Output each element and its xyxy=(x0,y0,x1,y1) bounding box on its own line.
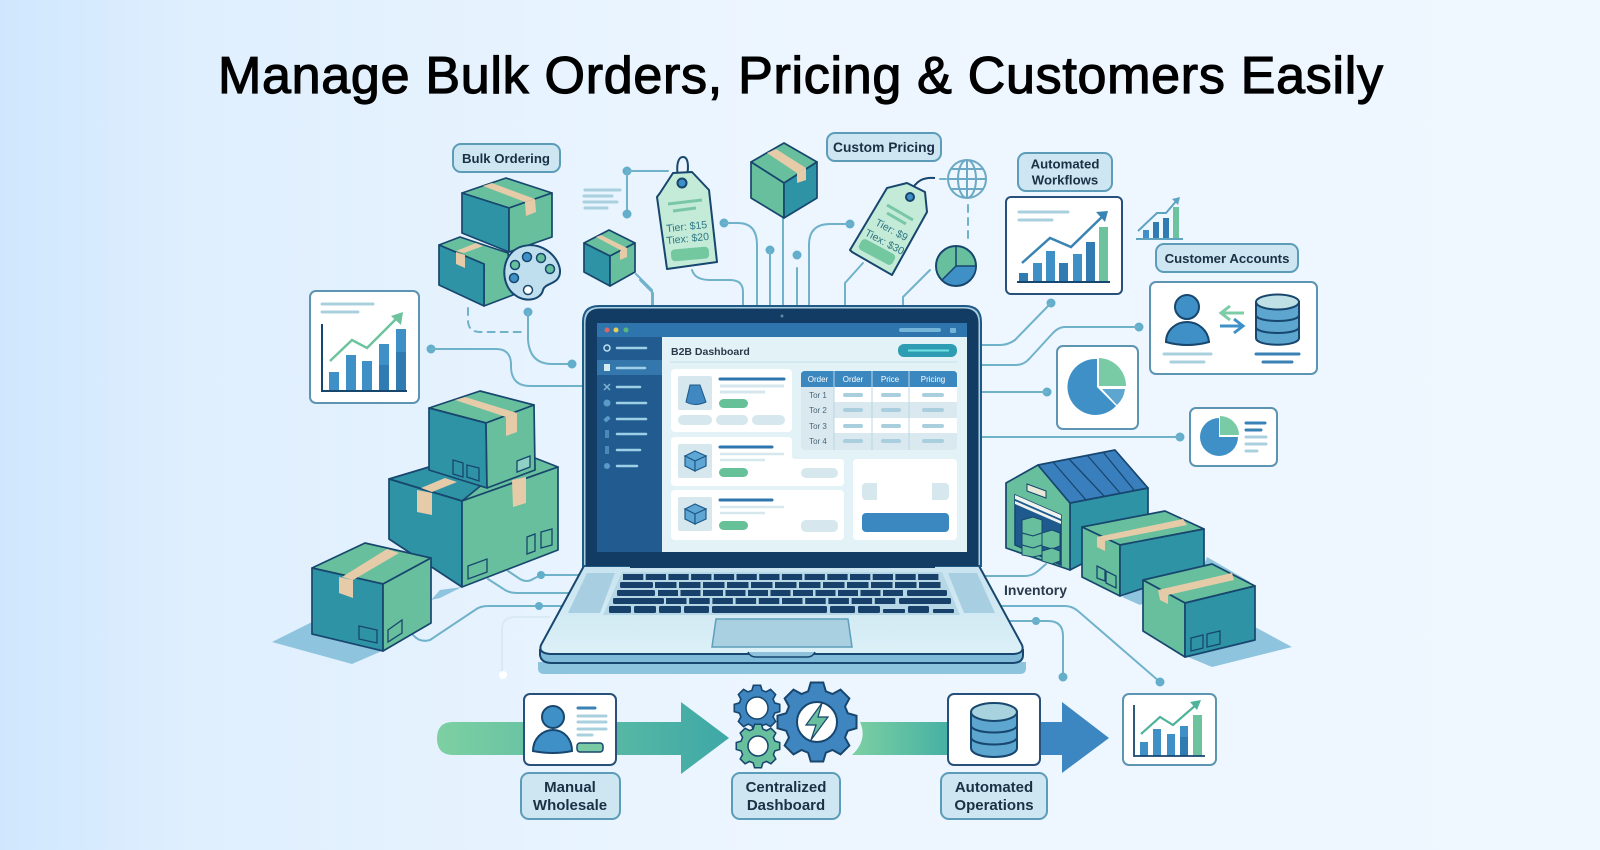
product card 2 xyxy=(671,437,844,486)
label: centralized dashboard: Centralized xyxy=(746,779,826,796)
icon: right price tag: Tier: $9 xyxy=(873,217,910,244)
top box xyxy=(429,391,535,488)
icon: left price tag xyxy=(657,157,717,269)
label: customer accounts xyxy=(1156,244,1298,272)
panel: customer accounts xyxy=(1150,282,1317,374)
icon: small trend chart xyxy=(1136,197,1183,239)
icon: stacked boxes with palette xyxy=(439,178,560,306)
pricing table: Tor 1 xyxy=(809,391,827,400)
arrow: manual to centralized xyxy=(437,702,729,774)
icon: right price tag: Tiex: $30 xyxy=(863,227,906,258)
pricing table: Price xyxy=(881,375,900,384)
panel: small pie chart card xyxy=(1190,408,1277,466)
pricing table: Tor 4 xyxy=(809,437,827,446)
label: customer accounts: Customer Accounts xyxy=(1165,251,1289,266)
icon: sync arrows xyxy=(1220,306,1244,333)
label: centralized dashboard xyxy=(732,773,840,819)
dashboard screen xyxy=(597,323,967,552)
text lines decoration near small box xyxy=(584,190,620,208)
dashboard heading: B2B Dashboard xyxy=(671,346,750,358)
label: bulk ordering xyxy=(453,144,560,172)
window top bar xyxy=(597,323,967,337)
icon: large box stack xyxy=(272,391,558,664)
pricing table: Tor 2 xyxy=(809,406,827,415)
icon: product box xyxy=(685,451,706,471)
icon: customer person xyxy=(1166,295,1209,345)
laptop shadow xyxy=(538,662,1026,674)
icon: warehouse xyxy=(1006,450,1148,570)
label: custom pricing xyxy=(827,133,941,161)
product card 3 xyxy=(671,490,844,540)
label: automated workflows: Automated xyxy=(1031,156,1099,172)
product card 1 xyxy=(671,369,792,432)
front box xyxy=(312,543,431,651)
label: bulk ordering: Bulk Ordering xyxy=(462,151,550,166)
icon: left price tag: Tier: $15 xyxy=(666,219,708,235)
icon: small box xyxy=(584,230,635,286)
label: manual wholesale xyxy=(521,773,620,819)
label: automated operations: Operations xyxy=(954,797,1034,814)
label: manual wholesale: Manual xyxy=(544,779,596,796)
label: centralized dashboard: Dashboard xyxy=(747,797,825,814)
box one xyxy=(1082,511,1204,596)
laptop base xyxy=(540,564,1023,663)
label: automated operations xyxy=(941,773,1047,819)
keyboard xyxy=(609,577,954,613)
icon: globe xyxy=(948,160,986,198)
title: Manage Bulk Orders, Pricing & Customers Easily xyxy=(218,47,1383,105)
label: automated workflows: Workflows xyxy=(1032,172,1098,188)
label: custom pricing: Custom Pricing xyxy=(833,140,935,155)
label: automated workflows xyxy=(1018,153,1112,191)
icon: product bag xyxy=(686,385,706,404)
laptop xyxy=(538,306,1026,674)
laptop lid xyxy=(583,306,981,566)
icon: right boxes xyxy=(1082,511,1292,667)
sidebar xyxy=(597,337,662,552)
box two xyxy=(1143,564,1255,657)
icon: product box xyxy=(685,504,706,524)
icon: gears xyxy=(734,682,857,768)
pricing table xyxy=(801,371,957,450)
icon: small pie chart xyxy=(936,246,976,286)
icon: paint palette xyxy=(504,245,560,300)
arrow: centralized to automated xyxy=(852,722,950,755)
icon: left price tag: Tiex: $20 xyxy=(666,231,710,247)
pricing table: Tor 3 xyxy=(809,422,827,431)
label: manual wholesale: Wholesale xyxy=(533,797,607,814)
arrow: automated to result xyxy=(1038,702,1109,773)
middle box xyxy=(389,458,558,587)
pricing table: Order xyxy=(843,375,864,384)
panel: manual wholesale card xyxy=(524,694,616,765)
dashboard button xyxy=(898,344,957,357)
order form card xyxy=(853,459,957,540)
label: inventory: Inventory xyxy=(1004,582,1067,598)
pricing table: Order xyxy=(808,375,829,384)
pricing table: Pricing xyxy=(921,375,945,384)
icon: center box xyxy=(751,143,817,218)
panel: pie chart card xyxy=(1057,346,1138,429)
icon: database xyxy=(1256,294,1299,345)
panel: result chart xyxy=(1123,694,1216,765)
label: automated operations: Automated xyxy=(955,779,1033,796)
panel: left trend chart xyxy=(310,291,419,403)
panel: automated operations card xyxy=(948,694,1040,765)
icon: right price tag xyxy=(850,178,935,275)
chart: automated workflows bars xyxy=(1006,197,1122,294)
connector lines xyxy=(413,166,1184,686)
